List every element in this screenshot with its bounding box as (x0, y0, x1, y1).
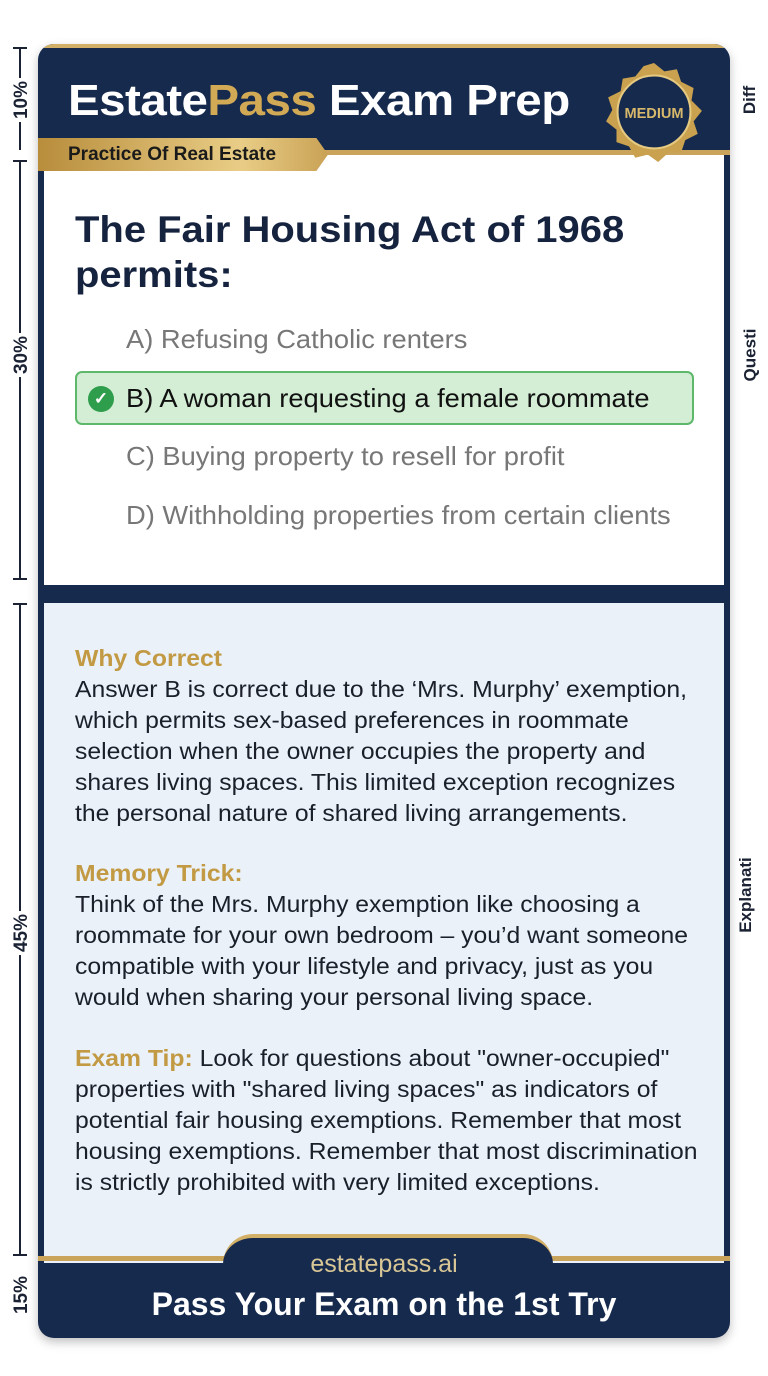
question (75, 209, 624, 295)
why correct: the personal nature of shared living arrangements. (75, 800, 628, 826)
memory trick: roommate for your own bedroom – you’d want someone (75, 922, 688, 948)
header (38, 44, 730, 164)
exam tip: properties with "shared living spaces" as indicators of (75, 1076, 657, 1102)
exam tip: housing exemptions. Remember that most discrimination (75, 1138, 698, 1164)
white question panel (44, 155, 724, 585)
left ruler (11, 47, 32, 1314)
left ruler: 15% (11, 1276, 32, 1314)
footer: estatepass.ai (310, 1250, 458, 1278)
left ruler: 10% (11, 81, 32, 119)
memory trick: compatible with your lifestyle and privacy, just as you (75, 953, 653, 979)
title: EstatePass Exam Prep (68, 76, 570, 125)
explanation panel (44, 603, 724, 1263)
memory trick (75, 860, 688, 1010)
left ruler: 45% (11, 914, 32, 952)
footer: Pass Your Exam on the 1st Try (152, 1286, 616, 1322)
right labels: Explanati (736, 857, 755, 933)
options (75, 324, 694, 530)
badge: MEDIUM (624, 106, 684, 122)
gold line (38, 150, 730, 155)
why correct: Answer B is correct due to the ‘Mrs. Murphy’ exemption, (75, 676, 687, 702)
question: The Fair Housing Act of 1968 (75, 209, 624, 250)
exam tip: potential fair housing exemptions. Remember that most (75, 1107, 681, 1133)
memory trick: Think of the Mrs. Murphy exemption like choosing a (75, 891, 640, 917)
option B correct: B) A woman requesting a female roommate (126, 383, 650, 413)
memory trick: would when sharing your personal living space. (75, 984, 593, 1010)
exam tip (75, 1045, 698, 1195)
memory trick: Memory Trick: (75, 860, 243, 886)
right labels (736, 86, 759, 933)
left ruler: 30% (11, 336, 32, 374)
exam tip: is strictly prohibited with very limited exceptions. (75, 1169, 600, 1195)
right labels: Questi (740, 329, 759, 381)
option D: D) Withholding properties from certain clients (126, 500, 671, 530)
option A: A) Refusing Catholic renters (126, 324, 467, 354)
why correct: shares living spaces. This limited exception recognizes (75, 769, 675, 795)
question: permits: (75, 254, 233, 295)
footer (38, 1234, 730, 1322)
exam tip: Exam Tip: Look for questions about "owner-occupied" (75, 1045, 669, 1071)
why correct (75, 645, 687, 826)
option B correct (75, 371, 694, 425)
right labels: Diff (740, 86, 759, 114)
badge (606, 63, 702, 162)
why correct: selection when the owner occupies the property and (75, 738, 645, 764)
ribbon: Practice Of Real Estate (68, 144, 276, 165)
option B correct: ✓ (94, 389, 108, 408)
ribbon (38, 138, 328, 171)
why correct: Why Correct (75, 645, 222, 671)
option C: C) Buying property to resell for profit (126, 441, 565, 471)
why correct: which permits sex-based preferences in roommate (75, 707, 629, 733)
